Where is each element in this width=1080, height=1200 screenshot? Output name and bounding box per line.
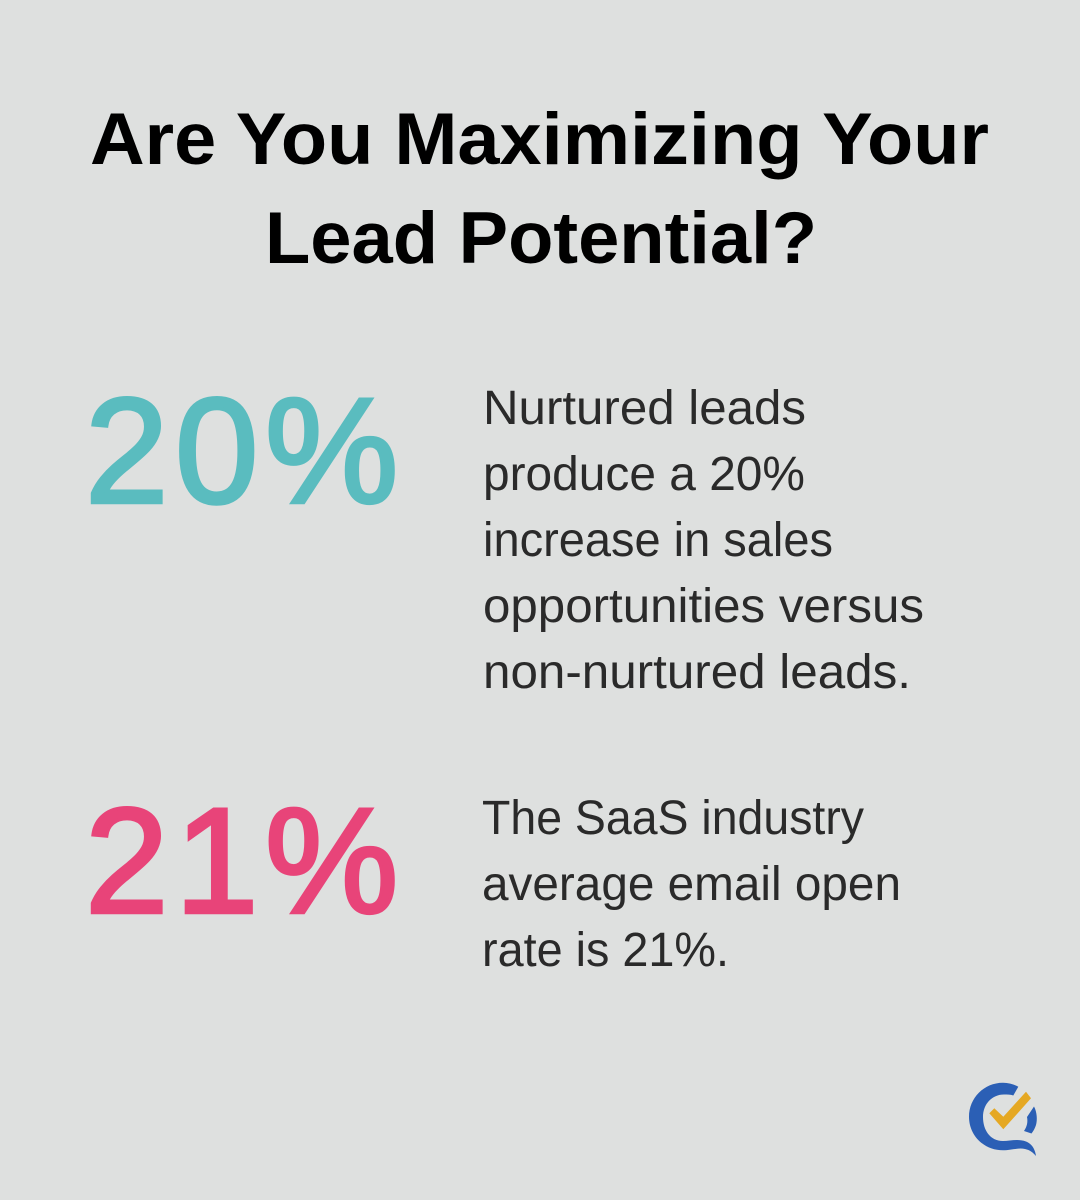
- description: nurtured leads: opportunities versus: [483, 580, 924, 633]
- title: Are You Maximizing Your: [90, 99, 989, 180]
- description: nurtured leads: produce a 20%: [483, 448, 805, 501]
- description: SaaS open rate: [482, 792, 901, 977]
- description: SaaS open rate: The SaaS industry: [482, 792, 864, 845]
- title: [90, 99, 989, 279]
- description: nurtured leads: Nurtured leads: [483, 382, 806, 435]
- description: nurtured leads: [483, 382, 924, 699]
- description: SaaS open rate: rate is 21%.: [482, 924, 729, 977]
- description: SaaS open rate: average email open: [482, 858, 901, 911]
- description: nurtured leads: non-nurtured leads.: [483, 646, 911, 699]
- title: Lead Potential?: [265, 198, 817, 279]
- description: nurtured leads: increase in sales: [483, 514, 833, 567]
- stat: 20%: 20%: [85, 366, 398, 534]
- stat: 21%: 21%: [85, 776, 398, 944]
- icon: logo with check mark: [969, 1083, 1037, 1156]
